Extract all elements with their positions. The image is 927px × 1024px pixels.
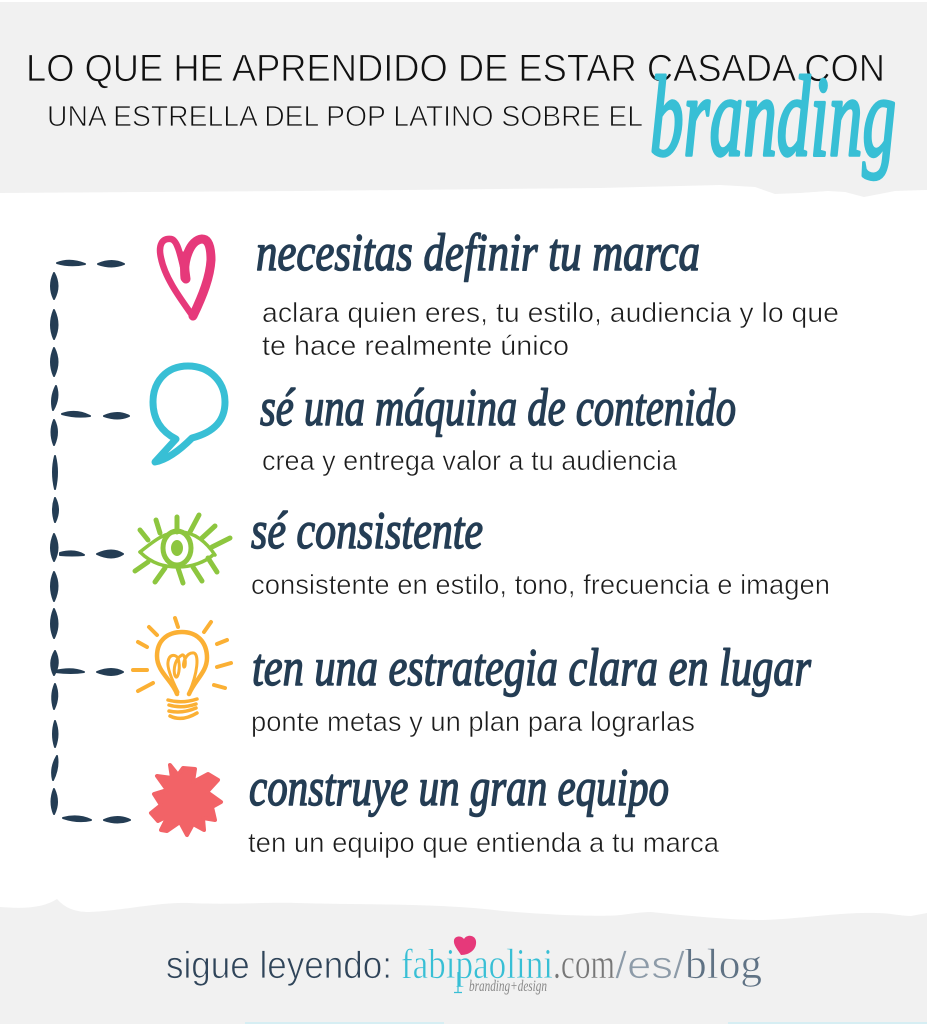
heading: construye un gran equipo: construye un gran equipo [249, 759, 669, 817]
footer band [0, 899, 927, 1024]
icon: eye [135, 515, 230, 583]
text: aclara quien eres: te hace realmente único [262, 330, 569, 361]
title: UNA ESTRELLA DEL POP LATINO SOBRE EL [47, 101, 643, 133]
title [26, 48, 896, 180]
icon: coral splat [151, 765, 221, 835]
heading: necesitas definir tu marca: necesitas definir tu marca [256, 224, 700, 282]
footer link: fabipaolini [401, 942, 553, 988]
footer link [166, 942, 762, 992]
text: crea y entrega valor: crea y entrega valor a tu audiencia [262, 445, 678, 476]
footer link: blog [685, 942, 762, 988]
heading: sé una máquina de contenido: sé una máquina de contenido [260, 379, 736, 437]
footer link: sigue leyendo: [166, 945, 392, 987]
text: aclara quien eres [262, 297, 839, 361]
dashed timeline [51, 261, 130, 822]
logo tagline: branding+design [469, 978, 547, 995]
text: aclara quien eres: aclara quien eres, tu estilo, audiencia y lo que [262, 297, 839, 328]
text: ten un equipo: ten un equipo que entienda a tu marca [248, 827, 720, 858]
heading: sé consistente: sé consistente [251, 502, 483, 560]
title: LO QUE HE APRENDIDO DE ESTAR CASADA CON [26, 48, 885, 90]
icon: heart [160, 239, 211, 316]
text: consistente en estilo: consistente en estilo, tono, frecuencia e imagen [251, 569, 830, 600]
logo heart [454, 936, 476, 955]
icon: speech bubble [153, 366, 225, 462]
text: ponte metas: ponte metas y un plan para lograrlas [251, 706, 695, 737]
cropped text at bottom edge [245, 1022, 927, 1024]
footer link: .com [553, 942, 615, 988]
icon: light bulb [133, 618, 231, 718]
header band [0, 2, 927, 197]
footer link: /es/ [615, 945, 686, 987]
